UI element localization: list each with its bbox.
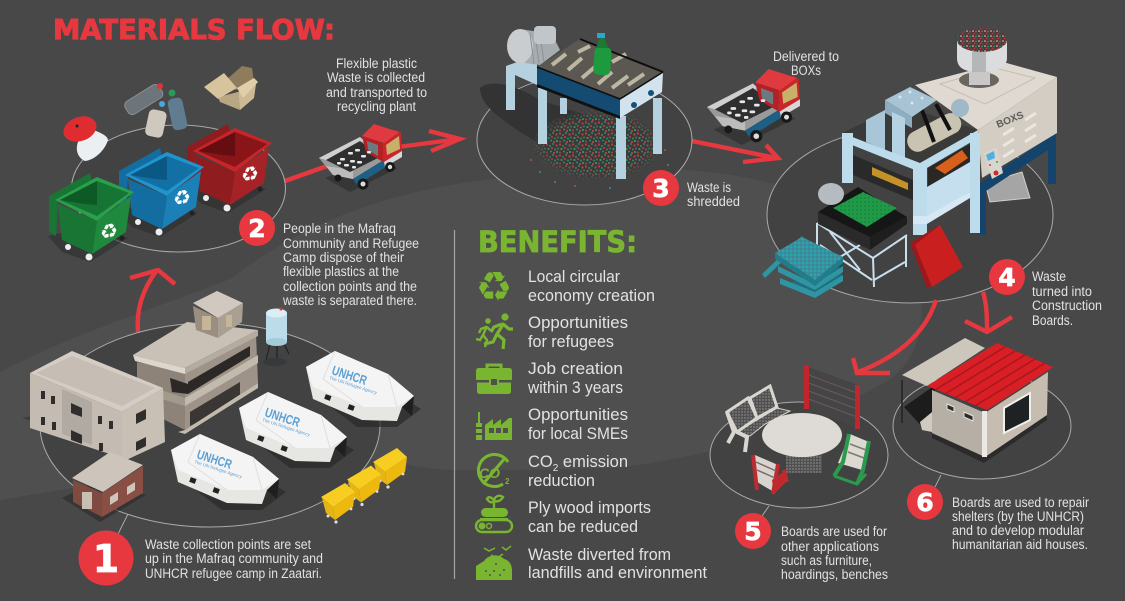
- text: job creation: Job creation: [528, 360, 623, 378]
- panel: step 2 collection bins: [48, 66, 286, 262]
- icon: red bin: [186, 124, 272, 213]
- text: step 3 description: shredded: [687, 194, 740, 209]
- icon: stack of teal boards: [762, 236, 843, 298]
- text: step 5 description: other applications: [781, 539, 879, 554]
- text: step 3 description: Waste is: [687, 180, 731, 195]
- text: ply wood: Ply wood imports: [528, 499, 651, 517]
- ellipse platform: machine: [767, 127, 1053, 303]
- icon: tray: [985, 172, 1030, 202]
- icon: tent middle: The UN Refugee Agency: [262, 417, 311, 438]
- ellipse platform: shredder: [477, 75, 692, 205]
- text: step 1 description: up in the Mafraq community and: [145, 551, 323, 566]
- arrow: community to bins: [130, 270, 175, 332]
- text: opportunities for SMEs: [528, 406, 628, 443]
- text: step 6 description: humanitarian aid houses.: [952, 537, 1088, 552]
- text: waste diverted: Waste diverted from: [528, 546, 671, 564]
- icon: factory: [476, 412, 512, 440]
- icon: plastic bag: [60, 112, 108, 161]
- text: step 2 description: People in the Mafraq: [283, 221, 396, 236]
- text: step 2 description: waste is separated there.: [282, 293, 417, 308]
- icon: machine body: [915, 62, 1057, 235]
- text: step 2 description: [282, 221, 419, 308]
- icon: hopper: [957, 28, 1007, 88]
- icon: tent middle: [239, 392, 354, 468]
- text: step 2 description: Camp dispose of their: [283, 250, 404, 265]
- icon: tent front: UNHCR: [195, 447, 234, 472]
- icon: no CO2: [478, 454, 510, 486]
- machine logo: BOXS: [995, 110, 1026, 131]
- truck to recycling plant: [319, 124, 402, 192]
- text: opportunities for SMEs: for local SMEs: [528, 425, 628, 443]
- icon: green chair: [834, 434, 869, 484]
- badge 6: 6: [916, 488, 934, 517]
- icon: red boards: [910, 225, 963, 288]
- icon: red bin: ♻: [241, 160, 259, 188]
- icon: blue bin: [118, 148, 204, 237]
- text: job creation: [527, 360, 623, 397]
- icon: press frame: [842, 87, 980, 235]
- text: collected and transported: Waste is collected: [327, 70, 425, 85]
- icon: round table: [762, 413, 842, 473]
- icon: plastic bottles: [123, 83, 188, 139]
- icon: briefcase: [476, 365, 512, 394]
- title: MATERIALS FLOW:: [53, 14, 335, 46]
- icon: white office building: [22, 351, 165, 462]
- icon: shredder machine: [506, 26, 663, 179]
- icon: green bin: ♻: [100, 218, 118, 245]
- icon: no CO2: CO: [479, 465, 500, 481]
- text: opportunities for refugees: for refugees: [528, 333, 614, 351]
- icon: tent back: [306, 351, 421, 427]
- text: CO2 emission: 2: [553, 463, 559, 474]
- text: collected and transported: Flexible plastic: [336, 56, 417, 71]
- text: step 2 description: Community and Refugee: [283, 236, 419, 251]
- badge 4: [989, 259, 1025, 295]
- ellipse platform: bins: [72, 125, 286, 252]
- panel: step 4 BOXs machine: [762, 28, 1057, 303]
- text: local circular economy: economy creation: [528, 287, 655, 305]
- text: ply wood: can be reduced: [528, 518, 638, 536]
- text: collected and transported: and transported to: [326, 85, 427, 100]
- text: delivered to BOXs: BOXs: [791, 63, 821, 78]
- text: step 4 description: turned into: [1032, 284, 1092, 299]
- text: step 1 description: [145, 537, 323, 581]
- text: collected and transported: recycling plant: [337, 99, 416, 114]
- text: delivered to BOXs: Delivered to: [773, 49, 839, 64]
- text: step 4 description: [1032, 269, 1102, 328]
- badge 1: 1: [93, 537, 119, 581]
- lighter background band: [0, 169, 922, 500]
- badge 1: [78, 530, 134, 586]
- panel: step 1 buildings and tents: [22, 291, 421, 527]
- text: opportunities for SMEs: Opportunities: [528, 406, 628, 424]
- text: step 2 description: collection points and the: [283, 279, 417, 294]
- badge 4: 4: [998, 263, 1016, 292]
- panel: step 3 shredder: [477, 26, 692, 205]
- badge 2: 2: [248, 214, 266, 243]
- icon: water tank: [263, 308, 289, 366]
- text: step 6 description: Boards are used to repair: [952, 495, 1089, 510]
- text: waste diverted: landfills and environment: [528, 564, 707, 582]
- arrow: machine to shelter: [965, 292, 1012, 332]
- ellipse platform: community: [40, 323, 380, 527]
- panel: benefits: [476, 225, 707, 582]
- text: step 5 description: [781, 524, 888, 582]
- ellipse platform: furniture: [710, 402, 888, 508]
- text: step 4 description: Boards.: [1032, 313, 1073, 328]
- arrow: machine to furniture: [853, 300, 936, 373]
- icon: blue bin: ♻: [173, 184, 191, 211]
- text: step 6 description: [952, 495, 1089, 552]
- text: opportunities for refugees: Opportunities: [528, 314, 628, 332]
- text: ply wood: [528, 499, 651, 536]
- icon: landfill: [476, 546, 512, 580]
- shadow of shredder: [480, 84, 600, 150]
- icon: cardboard box: [204, 66, 258, 110]
- text: waste diverted: [528, 546, 707, 582]
- icon: tent front: The UN Refugee Agency: [194, 459, 243, 480]
- arrow: bins to shredder: [285, 131, 460, 181]
- icon: conveyor with green board: [817, 183, 907, 287]
- text: step 5 description: such as furniture,: [781, 553, 872, 568]
- text: step 5 description: Boards are used for: [781, 524, 887, 539]
- icon: bench: [727, 386, 790, 452]
- text: local circular economy: Local circular: [528, 268, 620, 286]
- text: delivered to BOXs: [773, 49, 839, 78]
- ellipse platform: shelter: [893, 373, 1071, 479]
- text: opportunities for refugees: [528, 314, 628, 351]
- icon: green bottle: [593, 33, 612, 76]
- connector lines to number badges: [118, 475, 941, 534]
- icon: shredded plastic pile: [530, 110, 669, 189]
- icon: no CO2: 2: [505, 477, 510, 486]
- text: step 1 description: Waste collection points are set: [145, 537, 311, 552]
- text: step 4 description: Construction: [1032, 298, 1102, 313]
- text: CO2 emission: CO: [528, 453, 553, 471]
- icon: small brick building: [62, 452, 146, 522]
- icon: house: [902, 338, 1053, 463]
- text: step 3 description: [687, 180, 740, 209]
- icon: tent back: UNHCR: [330, 363, 369, 388]
- badge 6: [907, 484, 943, 520]
- text: step 2 description: flexible plastics at the: [283, 264, 399, 279]
- heading: benefits: BENEFITS:: [478, 225, 637, 259]
- text: step 6 description: shelters (by the UNHCR): [952, 509, 1084, 524]
- icon: tent middle: UNHCR: [263, 405, 302, 430]
- icon: green bin: [48, 173, 134, 262]
- panel: step 5 furniture: [710, 365, 888, 508]
- text: step 5 description: hoardings, benches: [781, 567, 888, 582]
- text: CO2 emission: emission: [558, 453, 628, 471]
- icon: concrete building with tower: [133, 291, 258, 434]
- icon: control panel: [984, 147, 1003, 179]
- text: step 4 description: Waste: [1032, 269, 1066, 284]
- badge 5: [735, 513, 771, 549]
- icon: logs and sprout: [476, 496, 512, 532]
- icon: tent back: The UN Refugee Agency: [329, 375, 378, 396]
- truck delivering to BOXs: [707, 69, 800, 145]
- icon: red chair: [753, 455, 788, 494]
- arrow: shredder to boxs machine: [692, 141, 778, 162]
- text: job creation: within 3 years: [527, 379, 623, 397]
- text: local circular economy: [528, 268, 655, 305]
- badge 3: [643, 170, 679, 206]
- text: CO2 emission: [528, 453, 628, 490]
- panel: step 6 shelter house: [893, 338, 1071, 479]
- text: step 6 description: and to develop modular: [952, 523, 1084, 538]
- icon: tent front: [171, 434, 286, 510]
- icon: runners: [476, 313, 513, 349]
- vertical divider: [454, 230, 456, 579]
- icon: recycle: ♻: [476, 263, 512, 311]
- badge 5: 5: [744, 517, 762, 546]
- badge 3: 3: [652, 174, 670, 203]
- icon: yellow bins: [321, 448, 407, 524]
- text: step 1 description: UNHCR refugee camp in Zaatari.: [145, 566, 322, 581]
- icon: hoarding wall: [804, 365, 860, 429]
- badge 2: [239, 210, 275, 246]
- text: CO2 emission: reduction: [528, 472, 595, 490]
- text: collected and transported: [326, 56, 427, 114]
